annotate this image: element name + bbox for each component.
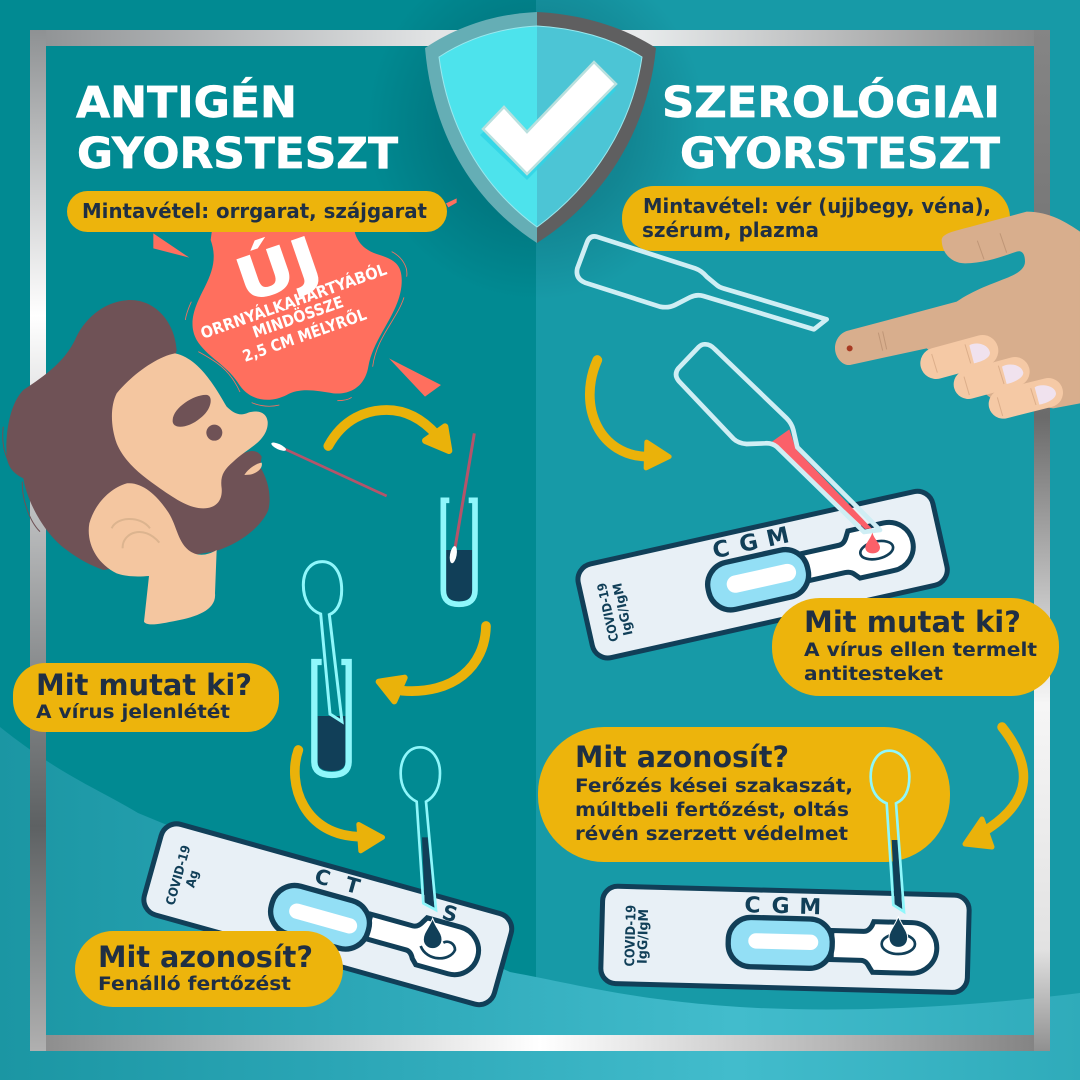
illustration: serology cassette with dropper: COVID-19 — [623, 905, 640, 967]
pill: mit mutat ki right: Mit mutat ki? — [804, 605, 1021, 639]
illustration: antigen test cassette: COVID-19 — [162, 843, 193, 907]
pill: mintavétel right: Mintavétel: vér (ujjbegy, véna), — [643, 194, 991, 218]
illustration: serology cassette with dropper: G — [771, 894, 790, 919]
callout: új badge: MINDÖSSZE — [250, 292, 346, 342]
arrow: tube to test cassette — [295, 750, 383, 851]
pill: mintavétel left — [67, 191, 447, 232]
illustration: serology cassette with dropper: IgG/IgM — [636, 909, 652, 964]
illustration: serology cassette with dropper: C — [744, 893, 761, 919]
pill: mit mutat ki right: A vírus ellen termelt — [804, 640, 1037, 661]
arrow: swab to tube — [328, 410, 449, 451]
illustration: antigen test cassette: C — [312, 864, 333, 891]
hand with pricked finger — [835, 212, 1080, 416]
pill: mintavétel right — [622, 186, 1010, 251]
pill: mit azonosít left — [75, 931, 343, 1007]
title: szerológiai gyorsteszt — [662, 77, 1001, 179]
pill: mintavétel right: szérum, plazma — [642, 218, 819, 242]
illustration: antigen test cassette: Ag — [182, 868, 202, 889]
pill: mit azonosít left: Fenálló fertőzést — [98, 974, 291, 995]
title: antigén gyorsteszt: GYORSTESZT — [77, 129, 399, 179]
pipette: filled with blood — [676, 344, 880, 553]
illustration: serology pipettes and cassette: G — [737, 529, 761, 558]
callout: új badge: ORRNYÁLKAHÁRTYÁBÓL — [198, 260, 389, 343]
icon: shield with check mark — [425, 12, 656, 243]
pill: mit mutat ki left — [13, 663, 279, 732]
illustration: serology pipettes and cassette — [575, 212, 1080, 661]
pill: mit azonosít right: révén szerzett védelmet — [575, 824, 848, 845]
illustration: antigen test cassette: T — [343, 872, 363, 899]
pill: mit mutat ki left: A vírus jelenlétét — [36, 702, 230, 723]
illustration: serology pipettes and cassette: C — [710, 535, 732, 564]
pill: mit mutat ki right: antitesteket — [804, 664, 943, 685]
cassette — [575, 488, 950, 661]
pill: mit azonosít right: múltbeli fertőzést, oltás — [575, 800, 849, 821]
pill: mit azonosít left: Mit azonosít? — [98, 940, 313, 974]
callout: új badge: ÚJ — [227, 223, 329, 317]
illustration: antigen test cassette: S — [439, 900, 460, 927]
pill: mit mutat ki right — [772, 598, 1059, 696]
title: szerológiai gyorsteszt: SZEROLÓGIAI — [662, 77, 1000, 128]
callout: új badge: 2,5 CM MÉLYRŐL — [240, 304, 369, 366]
illustration: antigen test cassette — [140, 747, 515, 1008]
title: antigén gyorsteszt — [76, 77, 399, 179]
pill: mit azonosít right: Mit azonosít? — [575, 740, 789, 774]
test tube with swab — [443, 433, 475, 604]
pill: mit azonosít right: Ferőzés kései szakaszát, — [575, 776, 853, 797]
pill: mit azonosít right — [538, 727, 950, 862]
pipette: empty — [577, 236, 827, 329]
illustration: serology cassette with dropper — [600, 751, 970, 993]
arrow: pipette to cassette — [590, 360, 669, 468]
illustration: serology pipettes and cassette: COVID-19 — [594, 581, 622, 643]
arrow: right panel downwards — [965, 727, 1024, 847]
title: antigén gyorsteszt: ANTIGÉN — [76, 77, 297, 128]
arrow: tube to dropper — [379, 626, 486, 701]
illustration: man's head with swab — [3, 300, 387, 624]
illustration: serology pipettes and cassette: IgG/IgM — [609, 582, 636, 637]
pill: mintavétel left: Mintavétel: orrgarat, szájgarat — [82, 199, 427, 223]
pill: mit mutat ki left: Mit mutat ki? — [36, 668, 252, 702]
callout: új badge — [153, 198, 457, 406]
title: szerológiai gyorsteszt: GYORSTESZT — [680, 129, 1001, 179]
illustration: serology cassette with dropper: M — [799, 895, 821, 920]
illustration: serology pipettes and cassette: M — [764, 522, 792, 553]
test tube with dropper — [303, 562, 349, 775]
tubes, swabs and arrows: antigen steps — [303, 410, 486, 775]
